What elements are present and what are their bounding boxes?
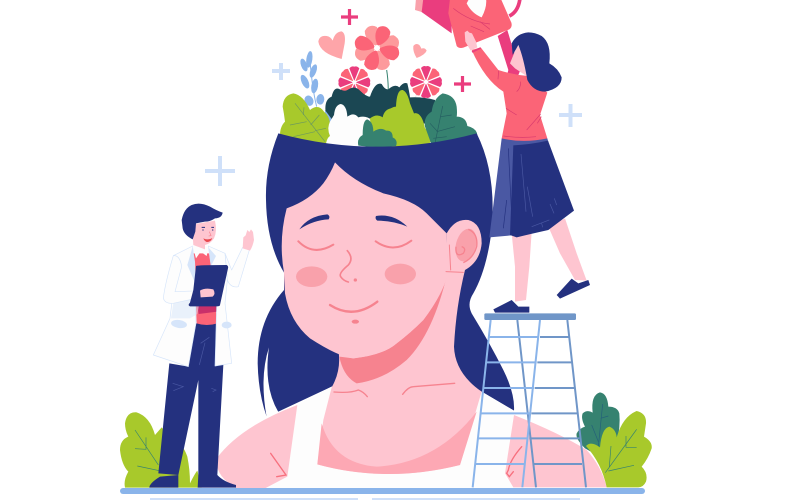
hair <box>182 204 223 239</box>
green leaf centre <box>370 90 433 148</box>
teal bush <box>576 392 620 457</box>
skirt folds <box>503 148 557 235</box>
cheeks, nostril and chin <box>296 264 416 324</box>
facial features <box>202 227 214 236</box>
green bush <box>586 411 652 487</box>
right red flower <box>410 66 442 98</box>
skirt front panel <box>510 141 574 237</box>
potted foliage right <box>576 392 652 487</box>
ladder top step <box>484 313 576 320</box>
hair <box>512 32 562 92</box>
plus signs <box>205 9 582 186</box>
facial features <box>271 241 463 477</box>
legs <box>512 232 532 302</box>
teal leaf right <box>425 93 477 145</box>
top <box>472 47 547 141</box>
trousers <box>158 323 223 475</box>
hand on clipboard <box>200 289 215 297</box>
hearts <box>318 31 427 59</box>
green leaf left <box>280 93 331 147</box>
left bush <box>120 412 202 488</box>
neck shadow <box>339 273 447 383</box>
ladder rear <box>517 320 586 487</box>
eyebrows <box>299 214 407 229</box>
ear <box>447 220 482 273</box>
dress <box>265 387 515 488</box>
left shoulder <box>217 405 297 488</box>
garden on top of the head <box>280 24 477 148</box>
top folds <box>498 71 541 137</box>
face <box>282 162 448 358</box>
woman's head and bust <box>217 133 515 488</box>
woman watering <box>472 30 590 313</box>
chest shadow <box>317 412 477 474</box>
pale blue accent <box>325 110 335 127</box>
clipboard <box>189 265 228 306</box>
ground line <box>120 488 645 500</box>
face <box>193 221 216 249</box>
shoes <box>149 475 236 488</box>
face <box>510 45 528 77</box>
coat lapels and pockets <box>171 247 232 329</box>
neck and chest <box>317 263 482 474</box>
watering can <box>415 0 520 51</box>
cuff <box>472 48 481 52</box>
trouser creases <box>173 337 216 392</box>
raised hand <box>243 229 254 251</box>
doctor <box>149 204 254 488</box>
skirt back panel <box>489 138 549 237</box>
right shoulder <box>505 415 607 487</box>
ladder <box>473 313 586 487</box>
watering can handle <box>498 30 521 101</box>
collar and neck <box>193 242 208 258</box>
left red flower <box>338 66 370 98</box>
ladder front <box>473 320 540 487</box>
large coral flower <box>353 24 401 72</box>
stems <box>364 70 417 117</box>
teal small plant <box>358 119 397 147</box>
dark teal bush <box>325 83 435 125</box>
white plant <box>326 104 372 148</box>
heart on can <box>467 0 486 17</box>
blue sprig <box>299 51 325 107</box>
hair gap <box>264 347 278 417</box>
shoes <box>493 279 590 313</box>
lab coat <box>153 246 249 367</box>
shirt <box>193 253 217 325</box>
hair <box>258 133 514 417</box>
hand on can <box>465 31 477 51</box>
